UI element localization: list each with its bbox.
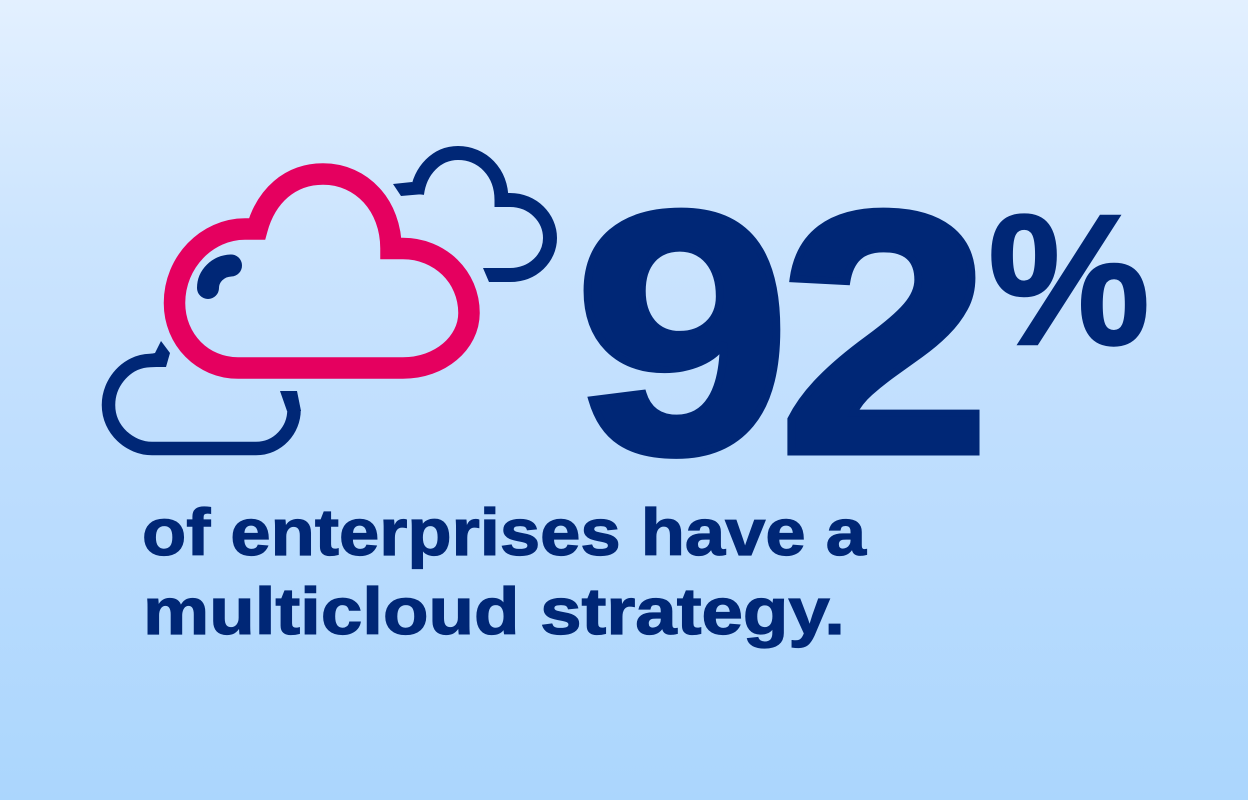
caption text bbox=[142, 495, 867, 648]
icon: central pink cloud bbox=[174, 174, 469, 368]
caption text: multicloud strategy. bbox=[143, 574, 845, 648]
big number 92 bbox=[574, 141, 991, 526]
icon: cloud highlight bbox=[208, 266, 231, 288]
big number 92: 2 bbox=[778, 141, 991, 526]
percent sign: % bbox=[988, 177, 1150, 384]
icon: three clouds bbox=[108, 153, 550, 448]
caption text: of enterprises have a bbox=[142, 495, 867, 569]
big number 92: 9 bbox=[574, 141, 791, 526]
icon: lower left navy cloud bbox=[108, 341, 301, 448]
icon: upper right navy cloud bbox=[393, 153, 550, 282]
